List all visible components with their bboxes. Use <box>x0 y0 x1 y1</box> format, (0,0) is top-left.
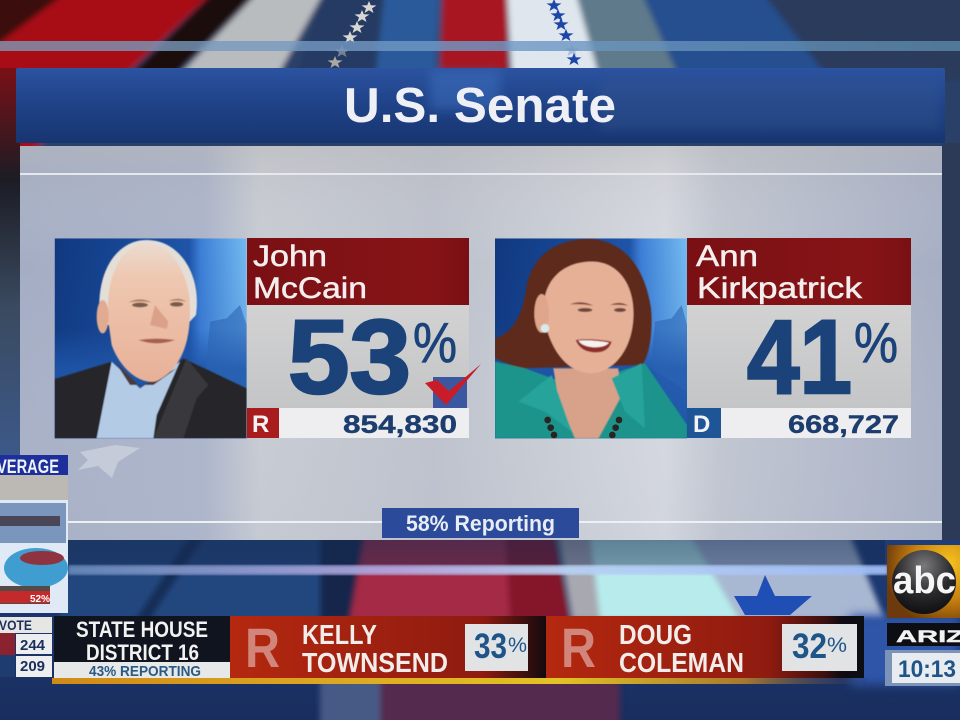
stars: blue column <box>546 0 582 65</box>
ticker race label: STATE HOUSE <box>76 617 208 642</box>
station label <box>887 623 960 646</box>
ticker candidate: Doug Coleman: 32 <box>792 627 827 666</box>
electoral vote box: VOTE <box>0 617 32 633</box>
name band <box>247 238 469 305</box>
ticker candidate: Kelly Townsend: 33 <box>474 627 507 666</box>
panel: Ann Kirkpatrick <box>495 238 911 439</box>
ticker <box>52 616 867 684</box>
party badge D <box>687 408 721 438</box>
background: bottom stripes <box>0 535 960 720</box>
electoral vote box <box>0 617 52 677</box>
party badge R <box>247 408 279 438</box>
votes: 854,830 <box>343 411 457 439</box>
ticker race label: 43% REPORTING <box>89 663 201 680</box>
ticker candidate: Kelly Townsend: % <box>508 634 527 657</box>
panel: John McCain <box>55 238 481 439</box>
ticker race label <box>54 616 230 680</box>
reporting badge: 58% Reporting <box>406 511 555 536</box>
title: U.S. Senate <box>344 79 616 133</box>
name: Ann <box>696 240 758 273</box>
clock: 10:13 <box>898 656 956 683</box>
logo: abc: abc <box>893 560 956 602</box>
ticker candidate: Kelly Townsend <box>230 616 546 679</box>
percentage: % <box>413 311 457 375</box>
title bar <box>16 68 945 143</box>
party badge D: D <box>693 411 710 438</box>
ticker candidate: Kelly Townsend: TOWNSEND <box>302 647 448 678</box>
percentage: 41 <box>747 299 852 416</box>
electoral vote box: 244 <box>20 637 46 654</box>
ticker candidate: Doug Coleman: COLEMAN <box>619 647 744 678</box>
star: large blue <box>734 575 812 615</box>
station label: ARIZ <box>896 627 960 646</box>
ticker candidate: Doug Coleman: DOUG <box>619 619 692 650</box>
icon: winner check <box>425 364 481 408</box>
name band: Kirkpatrick <box>697 272 863 305</box>
percentage <box>687 299 911 416</box>
panel: results <box>20 146 942 540</box>
votes <box>721 408 911 439</box>
name band <box>687 238 911 305</box>
name band: McCain <box>253 272 367 305</box>
votes: 668,727 <box>788 411 899 439</box>
name: John <box>253 240 327 273</box>
ticker candidate: Doug Coleman <box>546 616 864 679</box>
left coverage promo <box>0 455 68 613</box>
logo: abc <box>887 545 960 618</box>
stars: white column <box>328 1 376 68</box>
promo thumbnail <box>0 500 68 613</box>
electoral vote box: 209 <box>20 658 45 675</box>
reporting badge <box>382 508 579 538</box>
ticker race label: DISTRICT 16 <box>86 640 199 665</box>
clock <box>885 650 960 686</box>
percentage: 53 <box>288 299 411 416</box>
ticker candidate: Doug Coleman: % <box>827 634 847 657</box>
percentage: % <box>854 311 898 375</box>
photo: Ann Kirkpatrick <box>495 238 687 438</box>
ticker candidate: Kelly Townsend: R <box>245 616 280 679</box>
glass band top <box>0 41 960 51</box>
party badge R: R <box>252 411 269 438</box>
photo: John McCain <box>55 238 247 438</box>
ticker candidate: Kelly Townsend: KELLY <box>302 619 377 650</box>
percentage <box>247 299 469 416</box>
votes <box>279 408 469 439</box>
ticker candidate: Doug Coleman: R <box>561 616 596 679</box>
promo thumbnail: 52% <box>30 594 50 605</box>
